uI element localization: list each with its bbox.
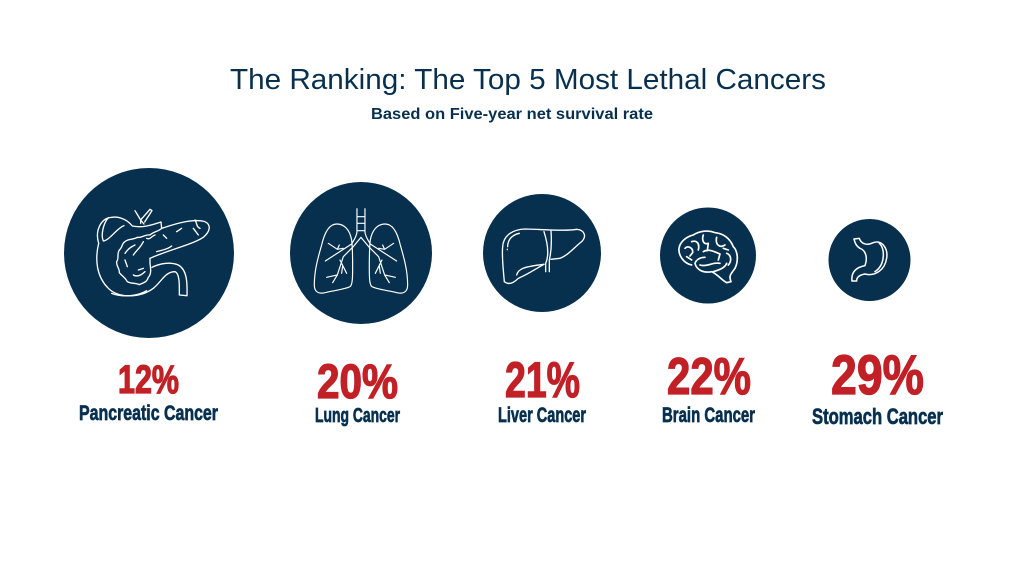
panel: liver cancer: [483, 194, 601, 427]
icon: stomach: [852, 238, 887, 281]
label: Lung Cancer: Lung Cancer: [315, 405, 400, 427]
icon: liver: [502, 229, 584, 283]
label: Pancreatic Cancer: Pancreatic Cancer: [79, 402, 218, 425]
value: 12%: 12%: [118, 358, 179, 402]
value: 21%: 21%: [505, 352, 580, 408]
value: 29%: 29%: [831, 343, 924, 406]
icon circle: lungs: [290, 182, 432, 324]
icon circle: brain: [660, 208, 756, 304]
label: Liver Cancer: Liver Cancer: [498, 404, 586, 427]
panel: lung cancer: [290, 182, 432, 427]
label: Stomach Cancer: Stomach Cancer: [812, 404, 943, 429]
subtitle: Based on Five-year net survival rate: [371, 106, 653, 123]
panel: stomach cancer: [812, 219, 943, 429]
title: The Ranking: The Top 5 Most Lethal Cancers: [230, 64, 826, 96]
icon: lungs: [314, 209, 408, 293]
icon: pancreas: [97, 209, 209, 296]
panel: brain cancer: [660, 208, 756, 427]
icon: brain: [679, 231, 737, 283]
label: Brain Cancer: Brain Cancer: [662, 404, 755, 427]
icon circle: stomach: [828, 219, 910, 301]
value: 22%: 22%: [667, 348, 751, 406]
panel: pancreatic cancer: [64, 168, 234, 425]
icon circle: pancreas: [64, 168, 234, 338]
icon circle: liver: [483, 194, 601, 312]
value: 20%: 20%: [317, 356, 398, 409]
